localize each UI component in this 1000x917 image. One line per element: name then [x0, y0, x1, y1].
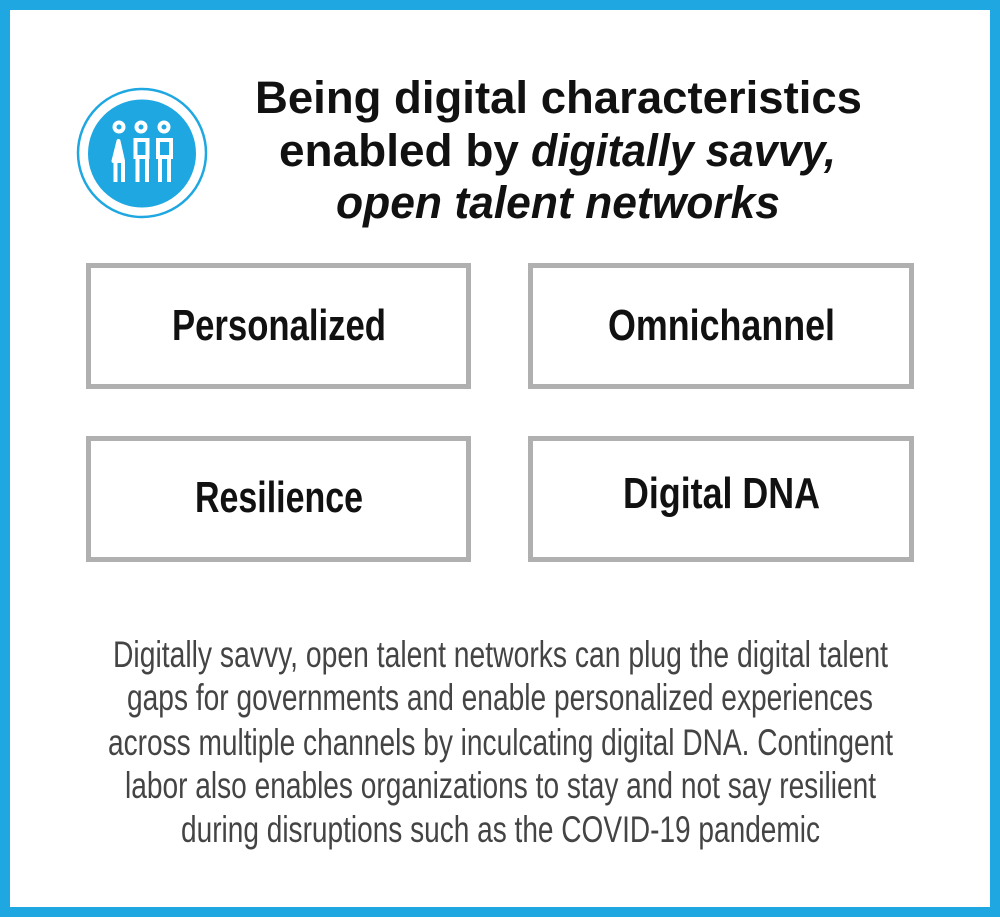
title: digitally savvy, [531, 125, 836, 176]
box: Digital DNA: Digital DNA [623, 469, 820, 518]
box: Personalized: Personalized [172, 301, 386, 350]
box: Resilience: Resilience [195, 473, 363, 522]
title: enabled by [279, 125, 519, 176]
box: Resilience [88, 438, 468, 560]
box: Digital DNA [530, 438, 912, 560]
box: Personalized [88, 266, 468, 386]
body text: during disruptions such as the COVID-19 pandemic [181, 809, 820, 850]
title: Being digital characteristics [255, 72, 862, 123]
box: Omnichannel [530, 266, 912, 386]
body text [108, 634, 894, 850]
title: open talent networks [336, 177, 780, 228]
box: Omnichannel: Omnichannel [608, 301, 835, 350]
icon: three people in circle [78, 89, 206, 217]
title [255, 72, 862, 228]
